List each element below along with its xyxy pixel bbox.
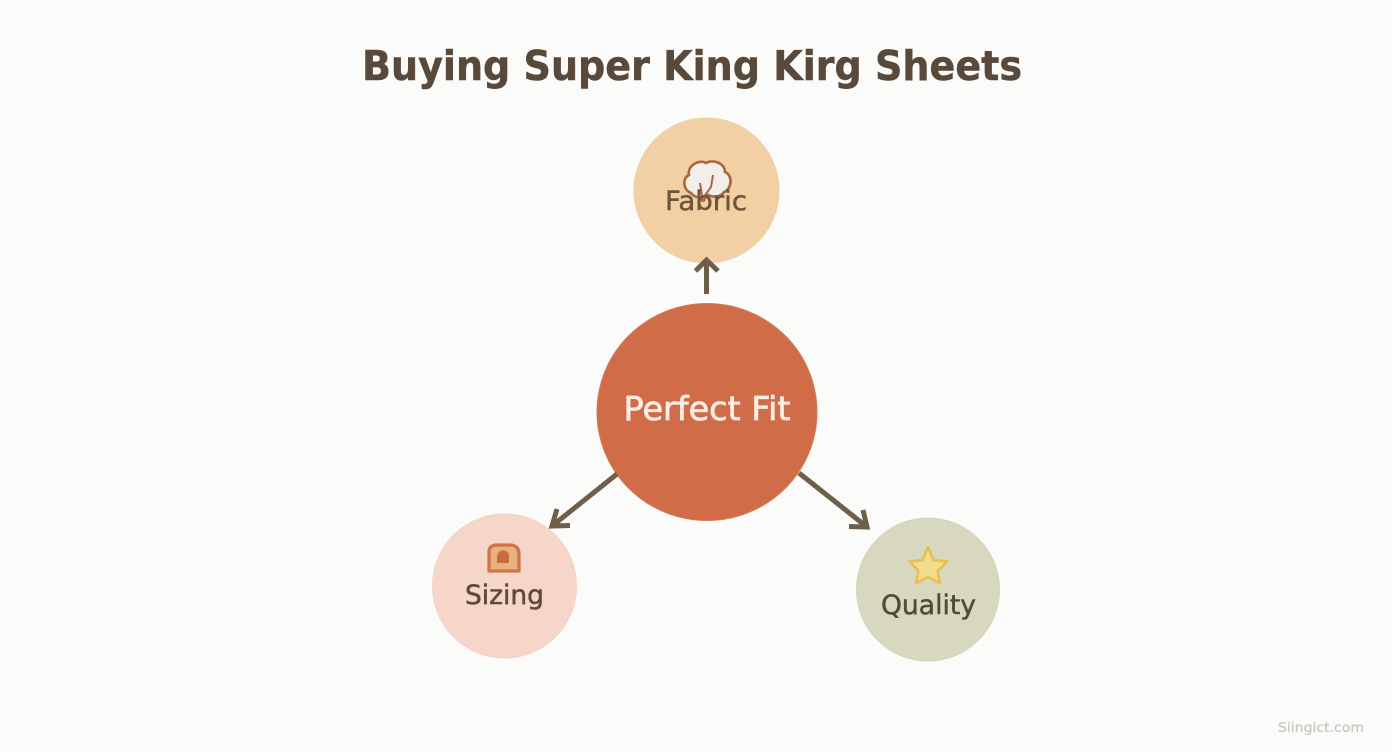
watermark: Siingict.com (1278, 720, 1364, 736)
arrow: to fabric (696, 260, 718, 294)
icon: star (910, 547, 948, 583)
node: sizing (432, 514, 576, 658)
label: perfect fit: Perfect Fit (624, 389, 791, 428)
node: quality (856, 518, 1000, 661)
icon: cotton boll (684, 161, 731, 202)
label: sizing: Sizing (465, 580, 544, 611)
label: fabric: Fabric (665, 186, 747, 217)
arrow: to quality (799, 473, 867, 527)
node: perfect fit (597, 304, 817, 520)
node: fabric (634, 118, 779, 263)
arrow: to sizing (552, 474, 617, 526)
label: quality: Quality (881, 590, 976, 621)
title: Buying Super King Kirg Sheets (362, 42, 1022, 90)
icon: sizing tag (489, 545, 519, 571)
